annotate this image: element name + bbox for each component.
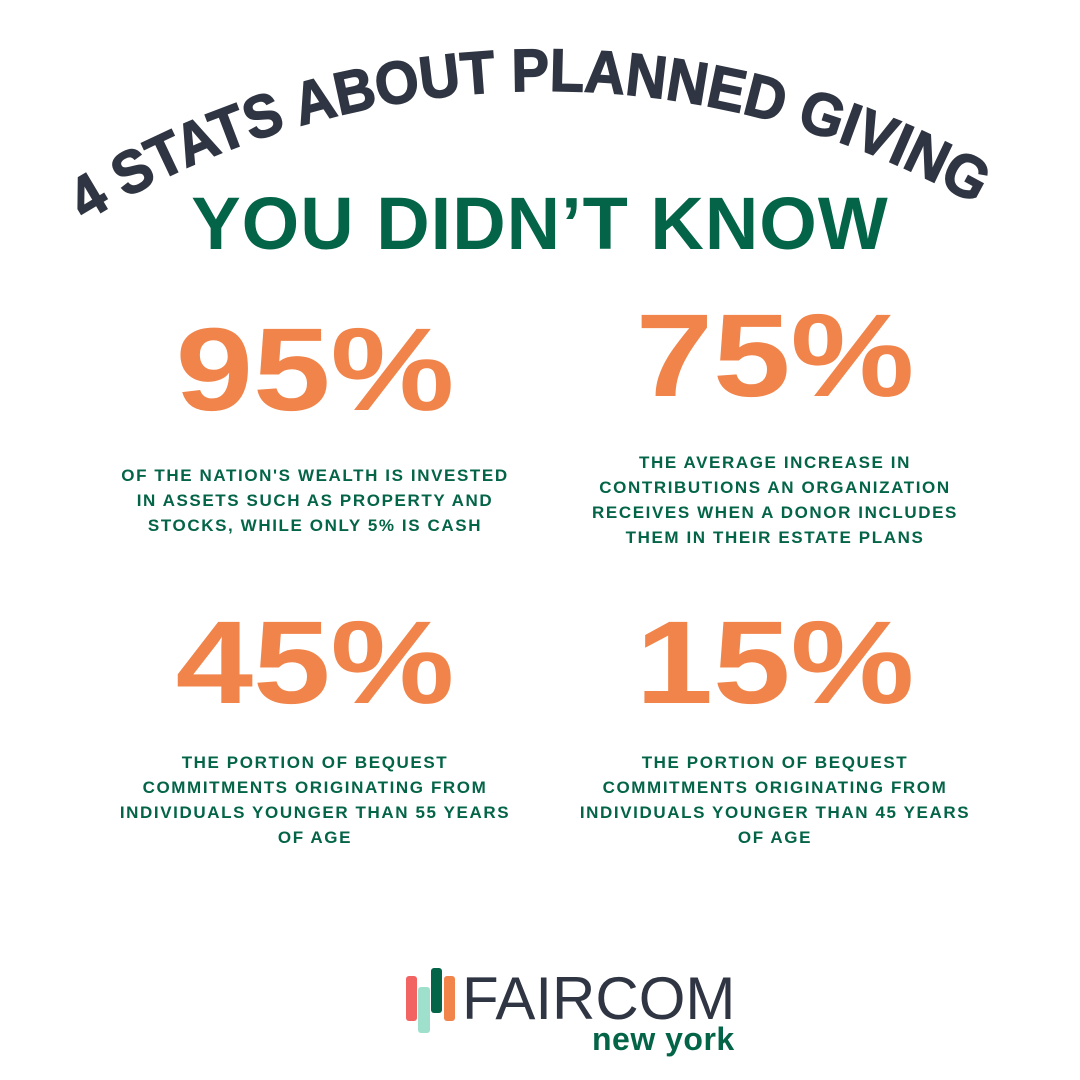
text 15: OF AGE bbox=[738, 828, 812, 847]
text 75 bbox=[592, 453, 958, 547]
subtitle: YOU DIDN’T KNOW bbox=[191, 182, 889, 265]
text 75: THEM IN THEIR ESTATE PLANS bbox=[626, 528, 924, 547]
logo wordmark: FAIRCOM bbox=[462, 965, 735, 1032]
text 15: COMMITMENTS ORIGINATING FROM bbox=[603, 778, 947, 797]
logo subtitle: new york bbox=[592, 1021, 735, 1057]
logo bars icon bbox=[406, 968, 455, 1033]
logo bbox=[406, 965, 735, 1057]
text 95: STOCKS, WHILE ONLY 5% IS CASH bbox=[148, 516, 482, 535]
stat 45 bbox=[120, 597, 510, 847]
text 15: INDIVIDUALS YOUNGER THAN 45 YEARS bbox=[580, 803, 970, 822]
text 75: CONTRIBUTIONS AN ORGANIZATION bbox=[599, 478, 951, 497]
text 15: THE PORTION OF BEQUEST bbox=[642, 753, 908, 772]
text 95 bbox=[121, 466, 509, 535]
text 75: THE AVERAGE INCREASE IN bbox=[639, 453, 911, 472]
text 45: OF AGE bbox=[278, 828, 352, 847]
text 45: COMMITMENTS ORIGINATING FROM bbox=[143, 778, 487, 797]
text 95: OF THE NATION'S WEALTH IS INVESTED bbox=[121, 466, 509, 485]
text 45: INDIVIDUALS YOUNGER THAN 55 YEARS bbox=[120, 803, 510, 822]
text 45: THE PORTION OF BEQUEST bbox=[182, 753, 448, 772]
stat 75 bbox=[592, 290, 958, 547]
text 75: RECEIVES WHEN A DONOR INCLUDES bbox=[592, 503, 958, 522]
text 95: IN ASSETS SUCH AS PROPERTY AND bbox=[137, 491, 493, 510]
number 15: 15% bbox=[636, 597, 914, 729]
stat 95 bbox=[121, 304, 509, 535]
number 95: 95% bbox=[176, 304, 454, 436]
stat 15 bbox=[580, 597, 970, 847]
text 15 bbox=[580, 753, 970, 847]
text 45 bbox=[120, 753, 510, 847]
number 75: 75% bbox=[636, 290, 914, 422]
number 45: 45% bbox=[176, 597, 454, 729]
title arc: 4 STATS ABOUT PLANNED GIVING bbox=[77, 48, 988, 216]
